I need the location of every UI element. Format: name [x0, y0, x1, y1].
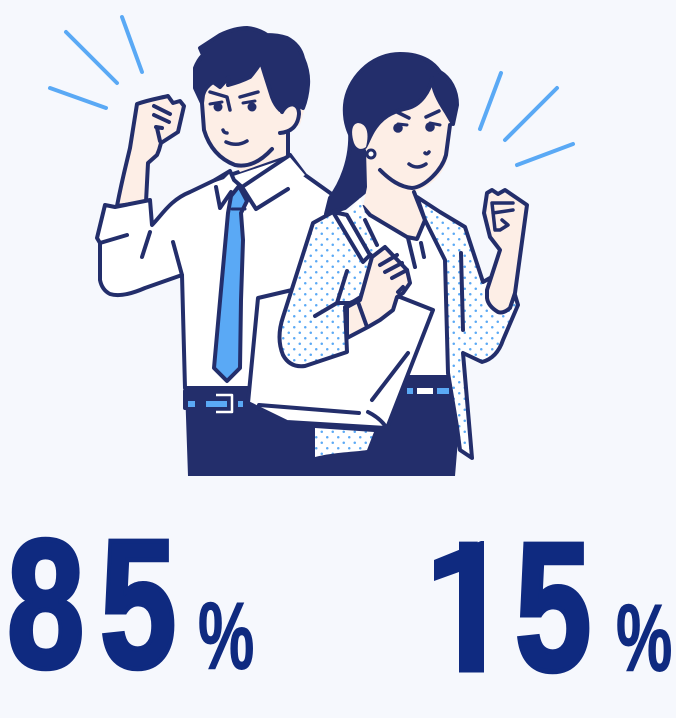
- woman's placket: [408, 238, 424, 267]
- number 85: 8: [7, 503, 84, 706]
- jacket right side: [417, 197, 518, 458]
- woman's brows and eyes: [393, 111, 440, 133]
- number 85: [7, 503, 176, 707]
- man's eyebrows and eyes: [210, 92, 258, 112]
- number 15: 5: [515, 506, 591, 710]
- man's fist fingers: [154, 106, 170, 141]
- woman's hand: [347, 247, 410, 338]
- man's collar: [216, 155, 305, 210]
- number 85: 5: [100, 503, 176, 707]
- man's ear: [280, 104, 299, 133]
- emphasis lines right: [480, 73, 573, 165]
- number 15: 1: [425, 506, 501, 710]
- man's trousers: [185, 375, 458, 476]
- tie knot line: [232, 208, 245, 210]
- jacket crease: [461, 253, 463, 330]
- man's face and neck: [202, 40, 307, 172]
- sleeve creases: [100, 232, 182, 275]
- number 15: [415, 506, 591, 710]
- strap edge line: [347, 215, 377, 255]
- man's shirt: [97, 155, 340, 388]
- woman: [248, 54, 527, 458]
- woman's nose and smile: [409, 152, 429, 167]
- stat: 15 percent: [415, 506, 672, 710]
- woman's earring: [367, 150, 375, 158]
- man's collar lines: [215, 155, 290, 209]
- woman's left sleeve: [280, 212, 372, 366]
- shopping bag: [248, 290, 433, 428]
- bag strap: [333, 212, 370, 262]
- man's hair: [195, 28, 308, 110]
- percent sign: %: [198, 583, 254, 690]
- man's tie: [214, 186, 247, 381]
- bag fold lines: [259, 353, 408, 427]
- woman's neck and face: [354, 78, 454, 239]
- man's jaw line: [202, 103, 288, 166]
- stat: 85 percent: [7, 503, 254, 707]
- man's belt: [183, 389, 253, 412]
- woman's raised arm and fist: [484, 190, 527, 312]
- woman's hair: [345, 54, 457, 147]
- sleeve fold lines: [315, 271, 365, 316]
- woman's ear: [352, 123, 367, 149]
- percent sign: %: [616, 585, 672, 692]
- woman's finger lines and bracelet: [358, 255, 407, 327]
- emphasis lines left: [50, 17, 142, 108]
- man: [97, 28, 458, 476]
- illustration: man and woman with raised fists: [50, 17, 573, 476]
- man's fist and arm: [117, 96, 184, 206]
- woman's blouse: [360, 210, 448, 375]
- woman's fist fingers: [492, 203, 513, 230]
- woman's ponytail and hair back: [326, 130, 368, 214]
- man's nose and smile: [223, 130, 247, 144]
- woman's jaw and neck line: [363, 125, 450, 239]
- woman's belt: [407, 388, 449, 394]
- jacket hem below bag: [315, 428, 374, 457]
